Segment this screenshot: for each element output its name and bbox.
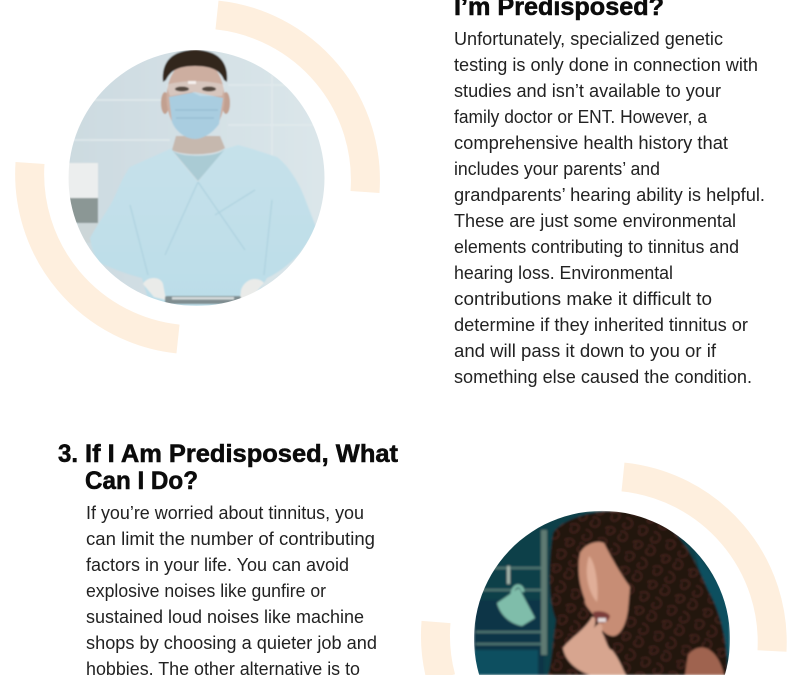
text block: what you can do: factors in your life. You can avoid — [86, 555, 349, 575]
heading: 3. If I Am Predisposed, What Can I Do?: 3. — [58, 440, 78, 468]
text block: what you can do: can limit the number of contributing — [86, 529, 375, 549]
text block: genetic testing answer: These are just some environmental — [454, 211, 736, 231]
text block: genetic testing answer: family doctor or ENT. However, a — [454, 107, 708, 127]
text block: genetic testing answer — [454, 29, 765, 387]
heading: 3. If I Am Predisposed, What Can I Do?: Can I Do? — [85, 467, 198, 495]
photo: doctor in mask and gown — [68, 50, 326, 306]
text block: genetic testing answer: determine if they inherited tinnitus or — [454, 315, 748, 335]
decorative arc: first photo, lower left — [30, 163, 178, 339]
text block: what you can do: sustained loud noises like machine — [86, 607, 364, 627]
text block: genetic testing answer: grandparents’ hearing ability is helpful. — [454, 185, 765, 205]
text block: genetic testing answer: something else caused the condition. — [454, 367, 752, 387]
text block: genetic testing answer: hearing loss. Environmental — [454, 263, 673, 283]
photo: woman with curly hair taking a pill — [474, 511, 730, 675]
text block: genetic testing answer: includes your parents’ and — [454, 159, 660, 179]
text block: genetic testing answer: Unfortunately, specialized genetic — [454, 29, 723, 49]
text block: what you can do — [86, 503, 377, 675]
text block: genetic testing answer: elements contributing to tinnitus and — [454, 237, 739, 257]
heading: 3. If I Am Predisposed, What Can I Do? — [58, 440, 399, 495]
text block: what you can do: explosive noises like gunfire or — [86, 581, 326, 601]
decorative arc: second photo, lower left — [435, 622, 441, 675]
text block: genetic testing answer: comprehensive health history that — [454, 133, 728, 153]
text block: what you can do: shops by choosing a quieter job and — [86, 633, 377, 653]
heading: 3. If I Am Predisposed, What Can I Do?: If I Am Predisposed, What — [85, 440, 399, 468]
text block: genetic testing answer: studies and isn’t available to your — [454, 81, 721, 101]
decorative arc: second photo, upper right — [623, 477, 772, 651]
text block: genetic testing answer: testing is only done in connection with — [454, 55, 758, 75]
decorative arc: first photo, upper right — [217, 15, 365, 192]
text block: genetic testing answer: contributions make it difficult to — [454, 289, 712, 309]
text block: genetic testing answer: and will pass it down to you or if — [454, 341, 717, 361]
text block: what you can do: If you’re worried about tinnitus, you — [86, 503, 364, 523]
